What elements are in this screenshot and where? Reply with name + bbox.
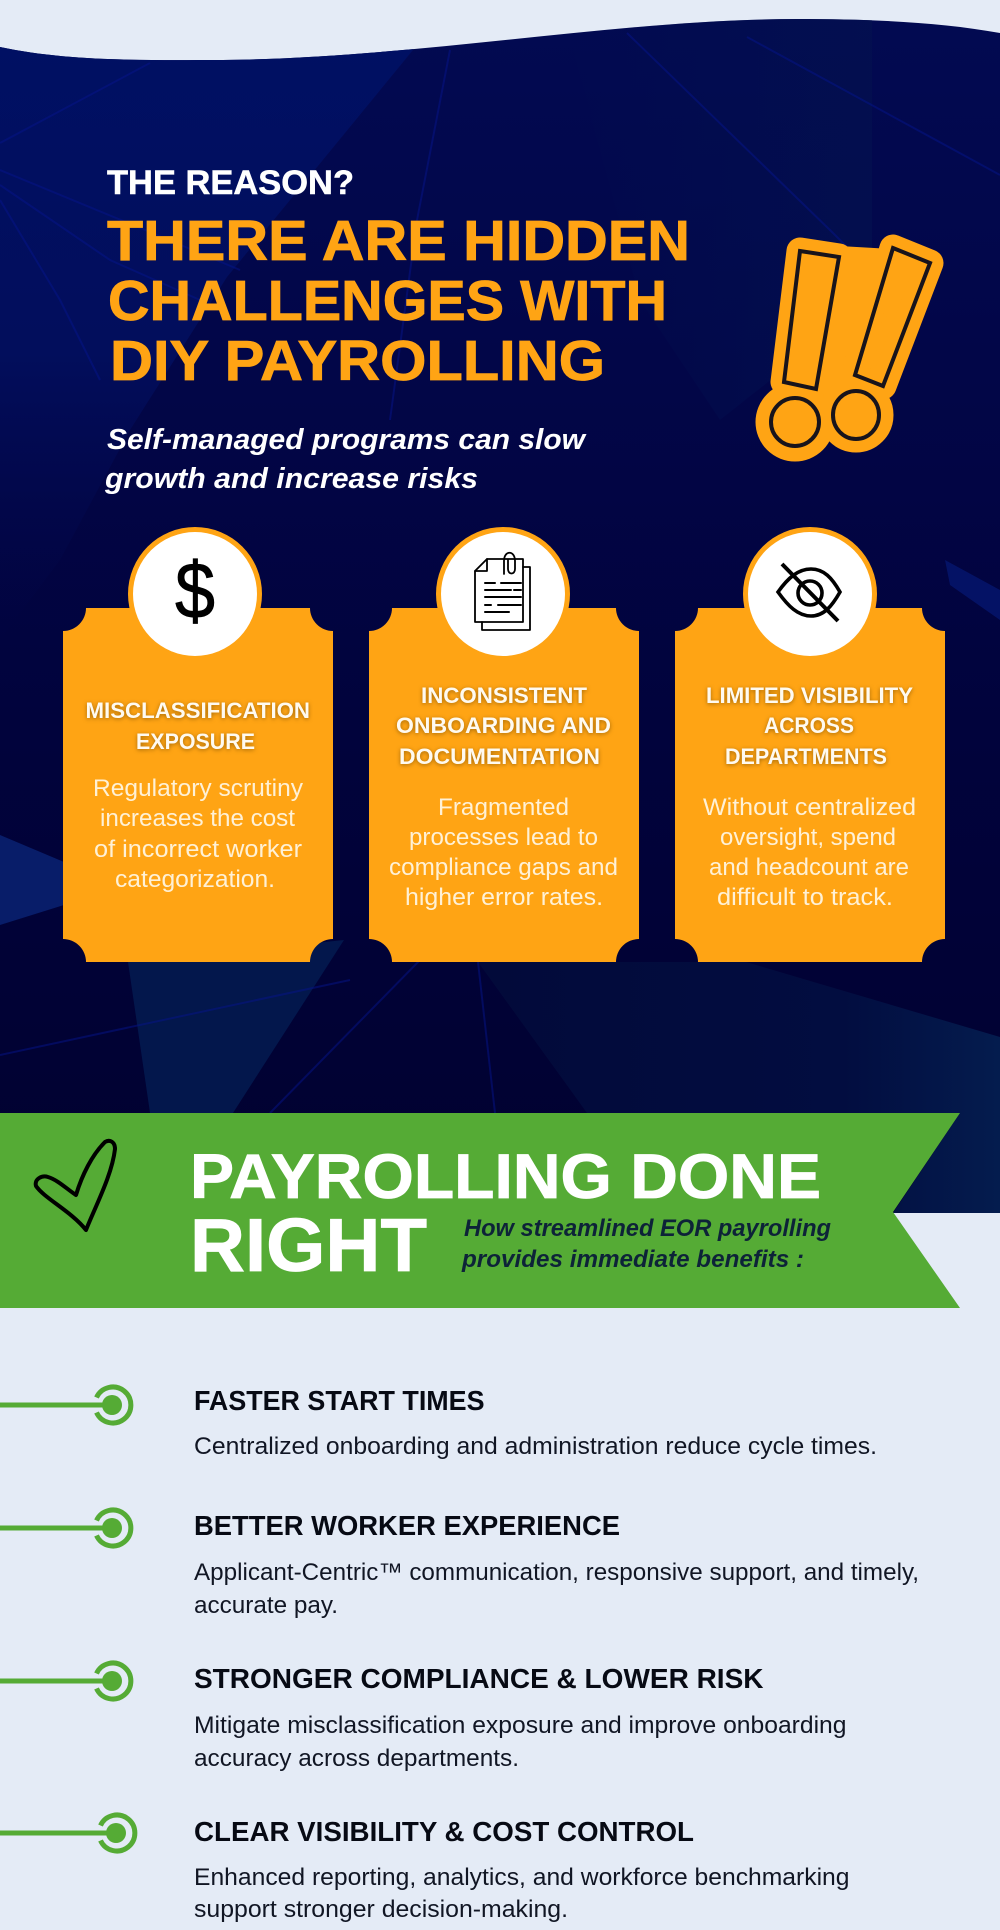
eyebrow: the reason: THE REASON? xyxy=(107,164,354,202)
panel: misclassification exposure: categorization. xyxy=(115,866,275,893)
panel: inconsistent onboarding and documentation: compliance gaps and xyxy=(389,854,618,881)
panel: inconsistent onboarding and documentation: INCONSISTENT xyxy=(421,683,588,708)
banner: payrolling done right xyxy=(0,1113,960,1308)
panel: misclassification exposure: of incorrect worker xyxy=(94,836,302,863)
subtitle xyxy=(104,424,588,495)
icon: dollar sign xyxy=(128,527,262,661)
panel: inconsistent onboarding and documentation: DOCUMENTATION xyxy=(399,744,600,769)
icon: double exclamation marks xyxy=(769,248,930,448)
panel: limited visibility across departments: difficult to track. xyxy=(717,884,893,911)
panel: misclassification exposure: increases the cost xyxy=(100,805,295,832)
title: there are hidden challenges with DIY payrolling: CHALLENGES WITH xyxy=(108,269,667,333)
icon: paper documents with clip xyxy=(436,527,570,661)
subtitle: Self-managed programs can slow xyxy=(107,424,588,456)
dark faceted background with wavy top xyxy=(0,0,1000,1213)
list item: stronger compliance and lower risk: STRONGER COMPLIANCE & LOWER RISK xyxy=(194,1663,764,1694)
panel: inconsistent onboarding and documentation: Fragmented xyxy=(438,794,569,821)
banner: payrolling done right: provides immediate benefits : xyxy=(461,1246,804,1273)
panel: limited visibility across departments: Without centralized xyxy=(703,794,916,821)
banner: payrolling done right: RIGHT xyxy=(190,1203,427,1287)
title: there are hidden challenges with DIY payrolling: DIY PAYROLLING xyxy=(110,329,605,393)
banner: payrolling done right: How streamlined EOR payrolling xyxy=(464,1215,831,1242)
list item: stronger compliance and lower risk: accuracy across departments. xyxy=(194,1745,519,1772)
list item: faster start times xyxy=(0,1385,877,1460)
panel: limited visibility across departments: DEPARTMENTS xyxy=(725,744,887,769)
list item: clear visibility and cost control: Enhanced reporting, analytics, and workforce benchmarking xyxy=(194,1864,850,1891)
panel: limited visibility across departments: oversight, spend xyxy=(720,824,896,851)
panel: inconsistent onboarding and documentation: higher error rates. xyxy=(405,884,603,911)
panel: inconsistent onboarding and documentation: ONBOARDING AND xyxy=(396,713,611,738)
list item: better worker experience: BETTER WORKER EXPERIENCE xyxy=(194,1510,620,1541)
list item: stronger compliance and lower risk: Mitigate misclassification exposure and improve onboarding xyxy=(194,1712,846,1739)
panel: limited visibility across departments: ACROSS xyxy=(764,713,854,738)
list item: faster start times: FASTER START TIMES xyxy=(194,1385,484,1416)
list item: clear visibility and cost control: CLEAR VISIBILITY & COST CONTROL xyxy=(194,1816,694,1847)
panel: limited visibility across departments: LIMITED VISIBILITY xyxy=(706,683,913,708)
icon: crossed-out eye xyxy=(743,527,877,661)
list item: stronger compliance and lower risk xyxy=(0,1663,846,1772)
list item: clear visibility and cost control xyxy=(0,1815,850,1923)
list item: better worker experience xyxy=(0,1510,919,1619)
icon: green connector and target xyxy=(0,1815,135,1851)
icon: green connector and target xyxy=(0,1663,131,1699)
list item: clear visibility and cost control: support stronger decision-making. xyxy=(194,1896,568,1923)
icon: green connector and target xyxy=(0,1510,131,1546)
list item: better worker experience: Applicant-Centric™ communication, responsive support, and timely, xyxy=(194,1559,919,1586)
panel: misclassification exposure: Regulatory scrutiny xyxy=(93,775,303,802)
title: there are hidden challenges with DIY payrolling xyxy=(107,209,690,393)
panel: misclassification exposure: MISCLASSIFICATION xyxy=(86,698,310,723)
panel: inconsistent onboarding and documentation: processes lead to xyxy=(409,824,598,851)
icon: dollar sign: $ xyxy=(175,546,215,635)
list item: faster start times: Centralized onboarding and administration reduce cycle times. xyxy=(194,1433,877,1460)
panel: misclassification exposure: EXPOSURE xyxy=(136,729,255,754)
icon: green connector and target xyxy=(0,1387,131,1423)
icon: hand-drawn check mark xyxy=(36,1141,115,1230)
subtitle: growth and increase risks xyxy=(104,463,478,495)
panel: inconsistent onboarding and documentation xyxy=(369,527,639,962)
list item: better worker experience: accurate pay. xyxy=(194,1592,338,1619)
panel: misclassification exposure xyxy=(63,527,333,962)
title: there are hidden challenges with DIY payrolling: THERE ARE HIDDEN xyxy=(107,209,690,273)
panel: limited visibility across departments: and headcount are xyxy=(709,854,909,881)
banner: payrolling done right: PAYROLLING DONE xyxy=(190,1142,821,1212)
panel: limited visibility across departments xyxy=(675,527,945,962)
